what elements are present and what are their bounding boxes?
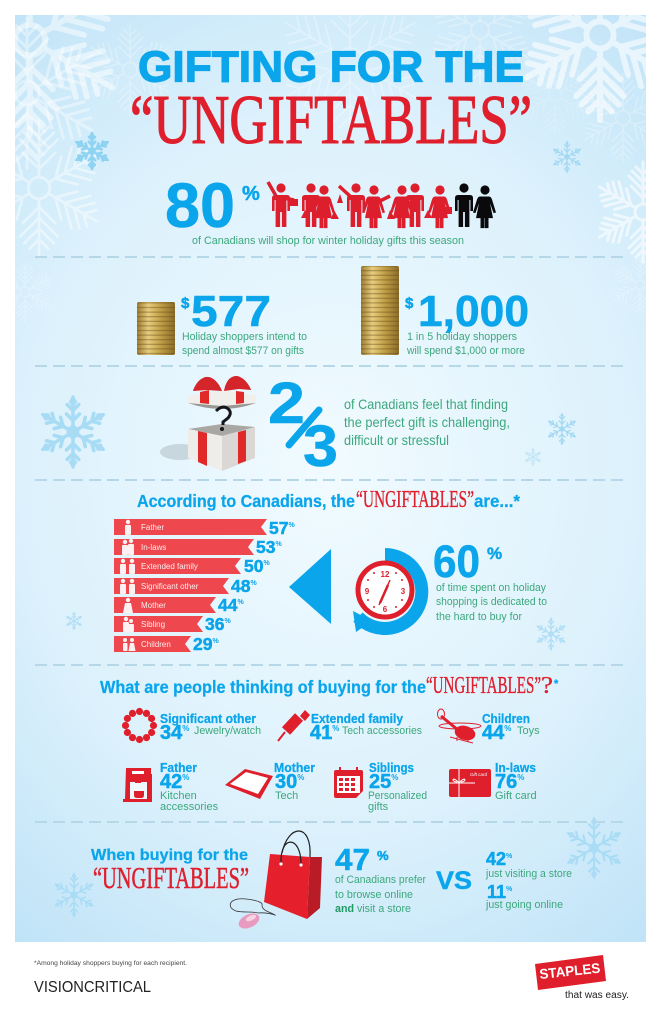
item: father: accessories xyxy=(160,801,219,813)
item: siblings: % xyxy=(391,773,398,782)
heading: according to Canadians: are...* xyxy=(474,491,520,511)
stat: store versus online: 11 xyxy=(487,882,506,902)
icon: tablet xyxy=(225,769,273,799)
logo: Staples: that was easy. xyxy=(565,990,629,1001)
logo: Staples xyxy=(535,955,629,1001)
heading: according to Canadians: “UNGIFTABLES” xyxy=(356,487,474,513)
stat: two thirds: the perfect gift is challenging, xyxy=(344,414,510,430)
icon: clock with circular arrow: 3 xyxy=(401,587,406,596)
item: siblings: Personalized xyxy=(368,790,427,802)
item: significant other xyxy=(122,708,261,744)
item: in-laws xyxy=(449,761,537,802)
bar chart: ungiftable recipients: 29 xyxy=(193,634,212,654)
stat: 80 percent shopping xyxy=(165,171,496,247)
bar chart: ungiftable recipients: % xyxy=(212,638,219,645)
bar chart: ungiftable recipients: Father xyxy=(141,523,164,532)
item: mother: % xyxy=(297,773,304,782)
stat: store versus online: % xyxy=(506,886,513,893)
icon: toy helicopter xyxy=(438,709,481,743)
bar chart: ungiftable recipients: % xyxy=(237,599,244,606)
icon: usb cable xyxy=(278,710,310,741)
heading: when buying: “UNGIFTABLES” xyxy=(93,860,249,895)
title: “UNGIFTABLES” xyxy=(130,82,532,159)
stat: 1000 dollars: will spend $1,000 or more xyxy=(406,345,525,357)
item: extended family: 41 xyxy=(310,722,332,744)
icon: tall coin stack xyxy=(361,266,399,355)
stat: 60 percent of time: of time spent on holiday xyxy=(436,582,546,594)
heading: what are people thinking: “UNGIFTABLES” xyxy=(426,673,541,699)
bar chart: ungiftable recipients xyxy=(114,518,295,654)
item: mother: Mother xyxy=(274,761,315,775)
item: children: 44 xyxy=(482,722,504,744)
heading: what are people thinking: ? xyxy=(541,673,553,699)
heading: when buying xyxy=(91,847,249,895)
item: father xyxy=(123,761,219,813)
heading: what are people thinking: What are people thinking of buying for the xyxy=(100,677,426,697)
icon: small coin stack xyxy=(137,302,175,355)
bar chart: ungiftable recipients: In-laws xyxy=(141,543,166,552)
item: in-laws: 76 xyxy=(495,771,517,793)
bar chart: ungiftable recipients: 44 xyxy=(218,595,237,615)
stat: store versus online: just visiting a store xyxy=(485,868,572,880)
item: extended family: % xyxy=(332,724,339,733)
stat: 1000 dollars: $ xyxy=(405,295,414,312)
bar chart: ungiftable recipients: % xyxy=(250,580,257,587)
icon: row of shoppers xyxy=(268,182,496,228)
stat: 47 percent: and visit a store xyxy=(335,903,411,915)
stat: 577 dollars: spend almost $577 on gifts xyxy=(182,345,304,357)
stat: 80 percent shopping: of Canadians will shop for winter holiday gifts this season xyxy=(192,235,464,247)
bar chart: ungiftable recipients: Significant other xyxy=(141,582,199,591)
bar chart: ungiftable recipients: 57 xyxy=(269,518,288,538)
bar chart: ungiftable recipients: % xyxy=(263,560,270,567)
icon: clock with circular arrow: 6 xyxy=(383,605,388,614)
stat: 47 percent xyxy=(335,842,426,915)
item: mother xyxy=(225,761,315,802)
bar chart: ungiftable recipients: 48 xyxy=(231,576,250,596)
stat: store versus online: just going online xyxy=(485,899,563,911)
icon: calendar xyxy=(334,767,363,798)
item: father: % xyxy=(182,773,189,782)
big fraction: 3 xyxy=(303,414,338,479)
item: siblings: 25 xyxy=(369,771,391,793)
stat: 1000 dollars: 1 in 5 holiday shoppers xyxy=(407,331,517,343)
icon: clock with circular arrow xyxy=(353,554,422,632)
stat: 80 percent shopping: 80 xyxy=(165,171,235,241)
stat: 47 percent: % xyxy=(377,848,389,863)
icon: gift card: Gift card xyxy=(470,772,488,777)
stat: 60 percent of time xyxy=(433,536,547,623)
icon: coffee machine xyxy=(123,768,152,802)
logo: Vision Critical: VISIONCRITICAL xyxy=(34,979,151,996)
bar chart: ungiftable recipients: Extended family xyxy=(141,562,198,571)
bar chart: ungiftable recipients: Children xyxy=(141,640,171,649)
icon: shopping bag and mouse xyxy=(230,831,322,932)
heading: when buying: When buying for the xyxy=(91,847,248,864)
item: extended family: Tech accessories xyxy=(342,725,422,737)
bar chart: ungiftable recipients: 36 xyxy=(205,614,224,634)
stat: 577 dollars: $ xyxy=(181,295,190,312)
item: father: Father xyxy=(160,761,197,775)
item: children: Children xyxy=(482,712,530,726)
item: significant other: % xyxy=(182,724,189,733)
item: in-laws: Gift card xyxy=(495,790,537,802)
item: significant other: 34 xyxy=(160,722,182,744)
big fraction: 2 xyxy=(268,371,305,436)
heading: what are people thinking xyxy=(100,673,559,699)
stat: 577 dollars xyxy=(137,287,307,357)
bar chart: ungiftable recipients: % xyxy=(275,541,282,548)
big fraction xyxy=(268,371,338,479)
item: mother: 30 xyxy=(275,771,297,793)
arrow: blue triangle pointing left xyxy=(289,549,331,624)
stat: two thirds: difficult or stressful xyxy=(344,432,449,448)
title: GIFTING FOR THE xyxy=(138,42,524,92)
item: extended family: Extended family xyxy=(311,712,403,726)
stat: 577 dollars: Holiday shoppers intend to xyxy=(182,331,307,343)
stat: 47 percent: 47 xyxy=(335,842,370,877)
stat: store versus online: % xyxy=(506,853,513,860)
footnote: *Among holiday shoppers buying for each recipient. xyxy=(34,960,187,967)
heading: what are people thinking: * xyxy=(554,678,559,690)
item: siblings: Siblings xyxy=(369,761,414,775)
stat: 60 percent of time: % xyxy=(487,544,502,563)
bar chart: ungiftable recipients: Sibling xyxy=(141,620,165,629)
bar chart: ungiftable recipients: 50 xyxy=(244,556,263,576)
stat: 47 percent: of Canadians prefer xyxy=(335,874,426,886)
heading: according to Canadians: According to Canadians, the xyxy=(137,491,355,511)
stat: 1000 dollars xyxy=(361,266,529,357)
heading: according to Canadians xyxy=(137,487,520,513)
label: vs: VS xyxy=(436,867,472,895)
item: extended family xyxy=(278,710,422,744)
item: in-laws: In-laws xyxy=(495,761,536,775)
title xyxy=(130,42,532,159)
item: significant other: Jewelry/watch xyxy=(194,725,261,737)
stat: 60 percent of time: shopping is dedicated to xyxy=(436,596,547,608)
item: significant other: Significant other xyxy=(160,712,256,726)
stat: 1000 dollars: 1,000 xyxy=(418,287,529,336)
bar chart: ungiftable recipients: % xyxy=(224,618,231,625)
item: father: 42 xyxy=(160,771,182,793)
stat: 47 percent: to browse online xyxy=(335,889,413,901)
icon: clock with circular arrow: 9 xyxy=(365,587,370,596)
item: children: % xyxy=(504,724,511,733)
item: mother: Tech xyxy=(275,790,298,802)
stat: 60 percent of time: the hard to buy for xyxy=(436,611,522,623)
stat: 80 percent shopping: % xyxy=(242,183,260,205)
bar chart: ungiftable recipients: 53 xyxy=(256,537,275,557)
stat: two thirds xyxy=(160,371,510,479)
bar chart: ungiftable recipients: Mother xyxy=(141,601,166,610)
stat: store versus online xyxy=(485,849,572,911)
stat: store versus online: 42 xyxy=(486,849,506,869)
bar chart: ungiftable recipients: % xyxy=(288,522,295,529)
item: siblings xyxy=(334,761,427,813)
stat: 60 percent of time: 60 xyxy=(433,536,480,587)
logo: Staples: STAPLES xyxy=(539,960,601,982)
item: father: Kitchen xyxy=(160,790,197,802)
item: in-laws: % xyxy=(517,773,524,782)
item: children: Toys xyxy=(517,725,540,737)
icon: open gift box xyxy=(160,376,256,471)
item: children xyxy=(438,709,540,744)
stat: two thirds: of Canadians feel that finding xyxy=(344,396,508,412)
stat: 577 dollars: 577 xyxy=(191,287,271,336)
icon: clock with circular arrow: 12 xyxy=(381,570,390,579)
item: siblings: gifts xyxy=(368,801,389,813)
icon: bracelet xyxy=(122,708,157,743)
